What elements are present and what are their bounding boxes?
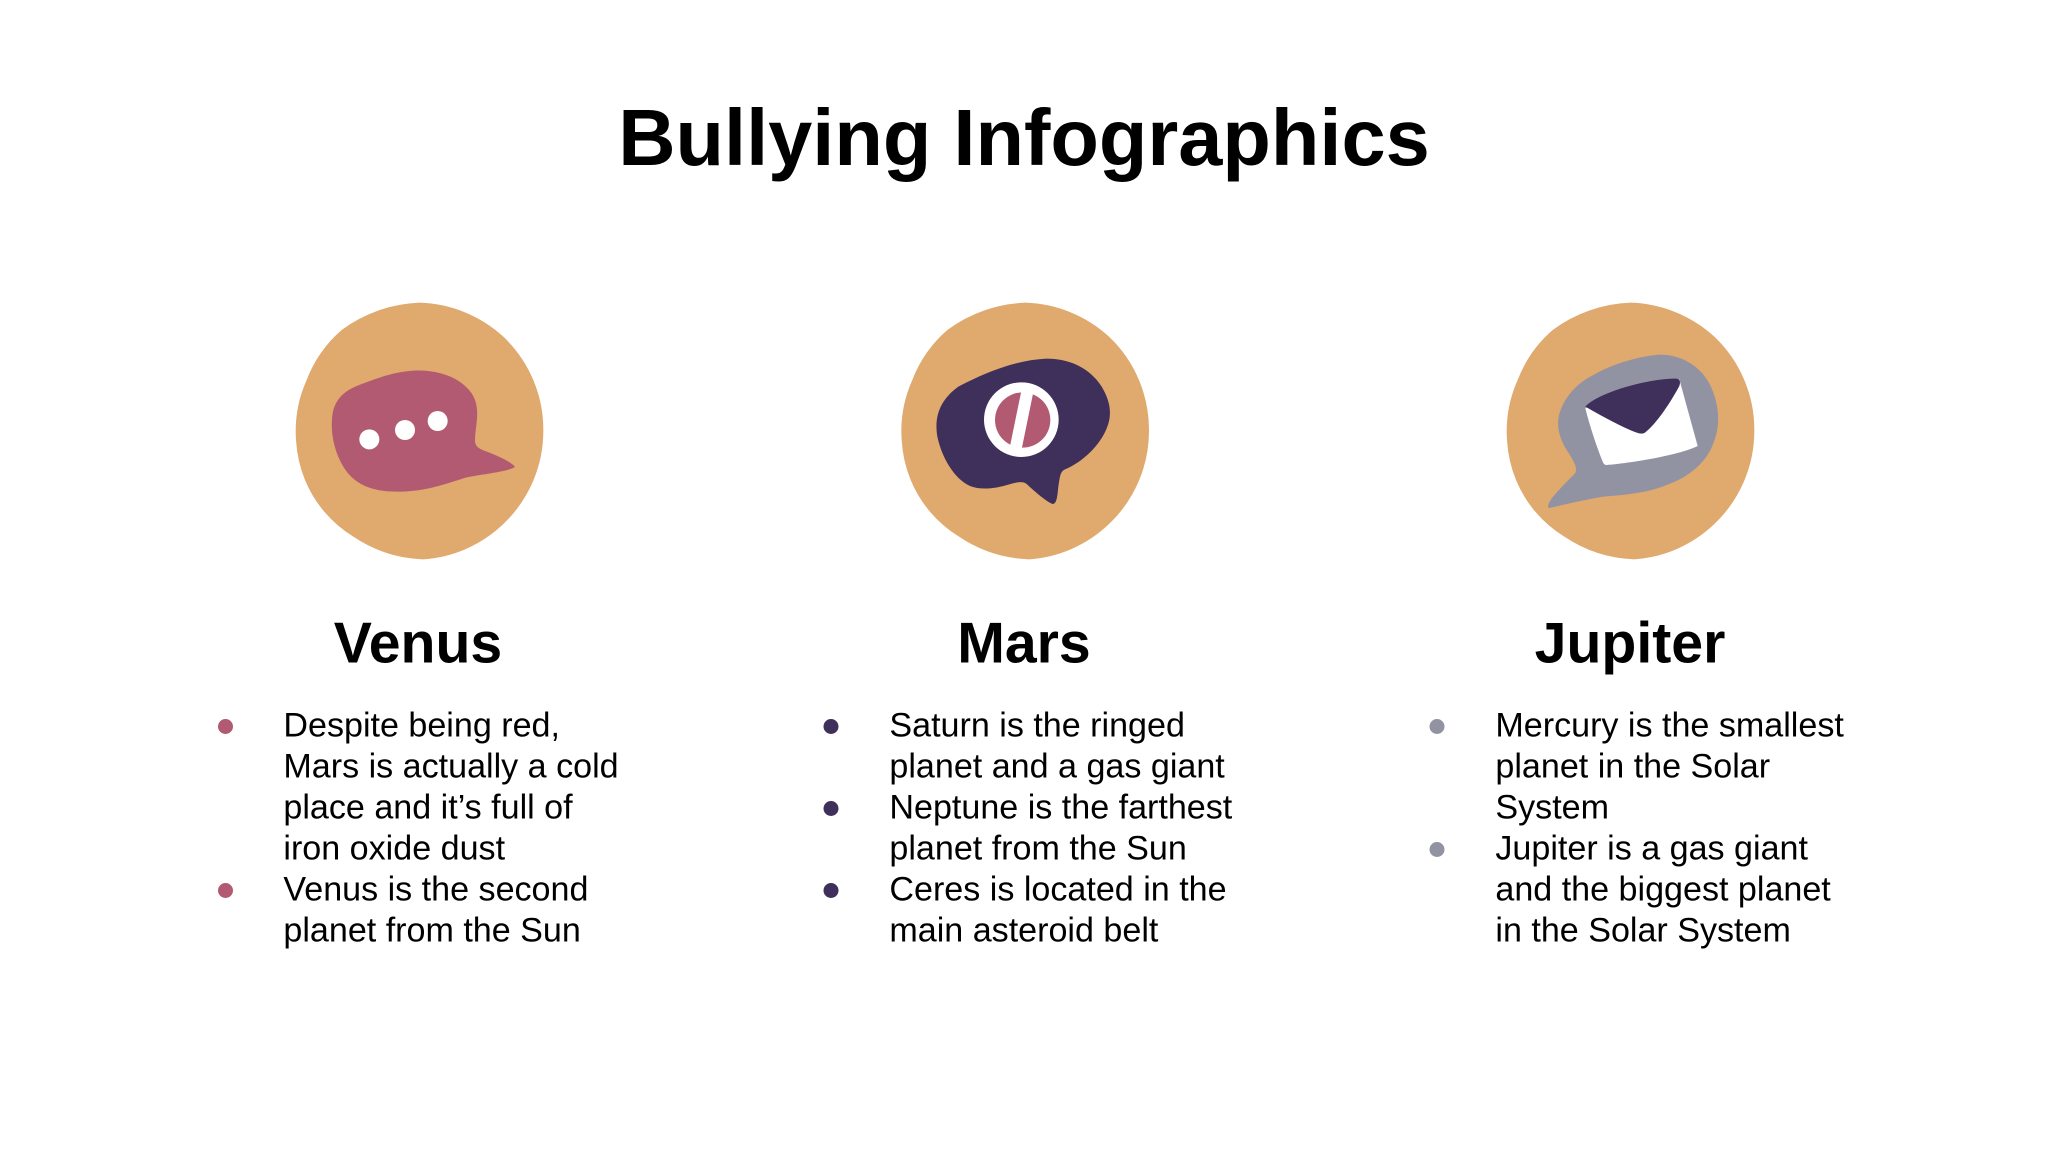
panel: Jupiter — [1430, 303, 1844, 949]
icon: speech bubble with envelope — [1507, 303, 1754, 559]
bullet list: Venus: Venus is the second — [283, 870, 588, 908]
bullet list: Jupiter: and the biggest planet — [1495, 870, 1831, 908]
bullet list: Venus — [218, 706, 619, 949]
bullet list: Venus: planet from the Sun — [283, 911, 581, 949]
icon: speech bubble with dots — [296, 303, 543, 559]
bullet list: Venus: place and it’s full of — [283, 788, 573, 826]
icon: speech bubble with prohibition sign — [901, 303, 1149, 559]
bullet list: Jupiter: Jupiter is a gas giant — [1495, 829, 1808, 867]
panel: Venus — [218, 303, 619, 949]
title: Bullying Infographics — [618, 93, 1430, 182]
bullet list: Venus: iron oxide dust — [283, 829, 506, 867]
heading: Venus: Venus — [334, 612, 502, 676]
heading: Mars: Mars — [957, 612, 1091, 676]
bullet list: Venus: Despite being red, — [283, 706, 560, 744]
bullet list: Jupiter: in the Solar System — [1495, 911, 1791, 949]
bullet list: Mars: Neptune is the farthest — [889, 788, 1233, 826]
bullet list: Mars: Saturn is the ringed — [889, 706, 1185, 744]
bullet list: Mars: planet and a gas giant — [889, 747, 1225, 785]
bullet list: Jupiter: System — [1495, 788, 1609, 826]
heading: Jupiter: Jupiter — [1535, 612, 1725, 676]
bullet list: Jupiter: Mercury is the smallest — [1495, 706, 1844, 744]
bullet list: Mars — [824, 706, 1233, 949]
bullet list: Mars: Ceres is located in the — [889, 870, 1227, 908]
bullet list: Mars: planet from the Sun — [889, 829, 1187, 867]
bullet list: Jupiter — [1430, 706, 1844, 949]
panel: Mars — [824, 303, 1233, 949]
bullet list: Mars: main asteroid belt — [889, 911, 1159, 949]
bullet list: Jupiter: planet in the Solar — [1495, 747, 1770, 785]
bullet list: Venus: Mars is actually a cold — [283, 747, 619, 785]
